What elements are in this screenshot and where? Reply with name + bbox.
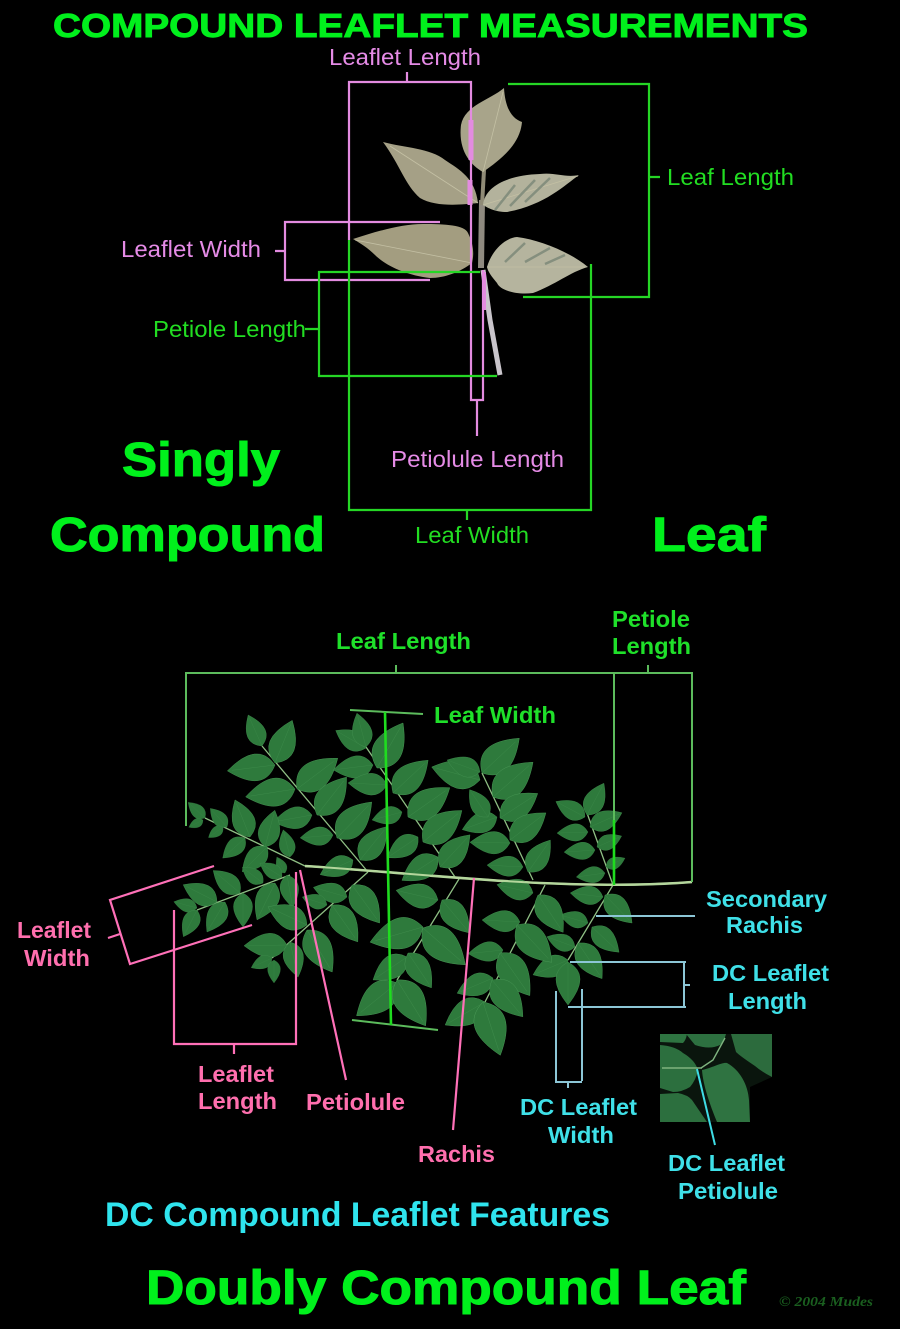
- label: petiole length: Petiole: [612, 606, 690, 632]
- label: leaflet width: Width: [24, 945, 90, 971]
- label: petiolule: Petiolule: [306, 1089, 405, 1115]
- label: DC leaflet width: Width: [548, 1122, 614, 1148]
- label: leaflet width: [17, 917, 91, 971]
- label: leaflet width: Leaflet Width: [121, 236, 261, 262]
- label: leaflet length: Leaflet: [198, 1061, 274, 1087]
- doubly compound leaf photo: [172, 711, 692, 1060]
- label: DC leaflet petiolule: DC Leaflet: [668, 1150, 785, 1176]
- label: DC leaflet length: [712, 960, 829, 1014]
- petiolule pointer: [300, 870, 346, 1080]
- label: leaflet length: Leaflet Length: [329, 44, 481, 70]
- heading: Singly: Singly: [122, 434, 280, 487]
- label: DC leaflet length: Length: [728, 988, 807, 1014]
- label: DC leaflet petiolule: Petiolule: [678, 1178, 778, 1204]
- measurement lines: petiole length: [305, 272, 497, 376]
- measurement lines: leaf width: [349, 240, 591, 520]
- heading: Leaf: Leaf: [652, 509, 767, 562]
- label: DC leaflet width: DC Leaflet: [520, 1094, 637, 1120]
- label: leaf width: Leaf Width: [415, 522, 529, 548]
- label: petiole length: [612, 606, 691, 659]
- label: secondary rachis: [706, 886, 827, 938]
- inset pointer: [697, 1069, 715, 1145]
- leaflet length bracket: [174, 872, 296, 1054]
- leaf length bracket: [186, 665, 692, 882]
- label: petiolule length: Petiolule Length: [391, 446, 564, 472]
- heading: doubly compound leaf: Doubly Compound Leaf: [146, 1262, 747, 1315]
- label: DC leaflet width: [520, 1094, 637, 1148]
- label: leaflet length: Length: [198, 1088, 277, 1114]
- copyright: © 2004 Mudes: [779, 1295, 874, 1310]
- measurement lines: leaf length: [508, 84, 660, 297]
- label: leaflet width: Leaflet: [17, 917, 91, 943]
- DC leaflet width bracket: [555, 989, 582, 1088]
- title: COMPOUND LEAFLET MEASUREMENTS: [53, 7, 808, 44]
- heading: Compound: Compound: [50, 509, 325, 562]
- measurement lines: leaflet length and petiolule: [349, 72, 484, 436]
- label: rachis: Rachis: [418, 1141, 495, 1167]
- label: secondary rachis: Secondary: [706, 886, 827, 912]
- label: petiole length: Petiole Length: [153, 316, 306, 342]
- singly compound leaf photo: [353, 88, 588, 375]
- measurement lines: leaflet width: [275, 222, 440, 280]
- label: DC leaflet petiolule: [668, 1150, 785, 1204]
- label: leaf length: Leaf Length: [667, 164, 794, 190]
- label: petiole length: Length: [612, 633, 691, 659]
- leaflet width bracket: [108, 866, 252, 964]
- label: leaf length: Leaf Length: [336, 628, 471, 654]
- petiole bright segment: [613, 820, 615, 885]
- leaf width bracket: [350, 710, 438, 1030]
- label: secondary rachis: Rachis: [726, 912, 803, 938]
- DC leaflet length bracket: [568, 962, 690, 1007]
- label: DC leaflet length: DC Leaflet: [712, 960, 829, 986]
- label: leaflet length: [198, 1061, 277, 1114]
- secondary rachis pointer: [596, 915, 695, 917]
- label: leaf width: Leaf Width: [434, 702, 556, 728]
- inset photo: DC leaflet petiolule: [660, 1034, 772, 1122]
- subheading: DC compound leaflet features: DC Compound Leaflet Features: [105, 1196, 610, 1234]
- rachis pointer: [453, 878, 474, 1130]
